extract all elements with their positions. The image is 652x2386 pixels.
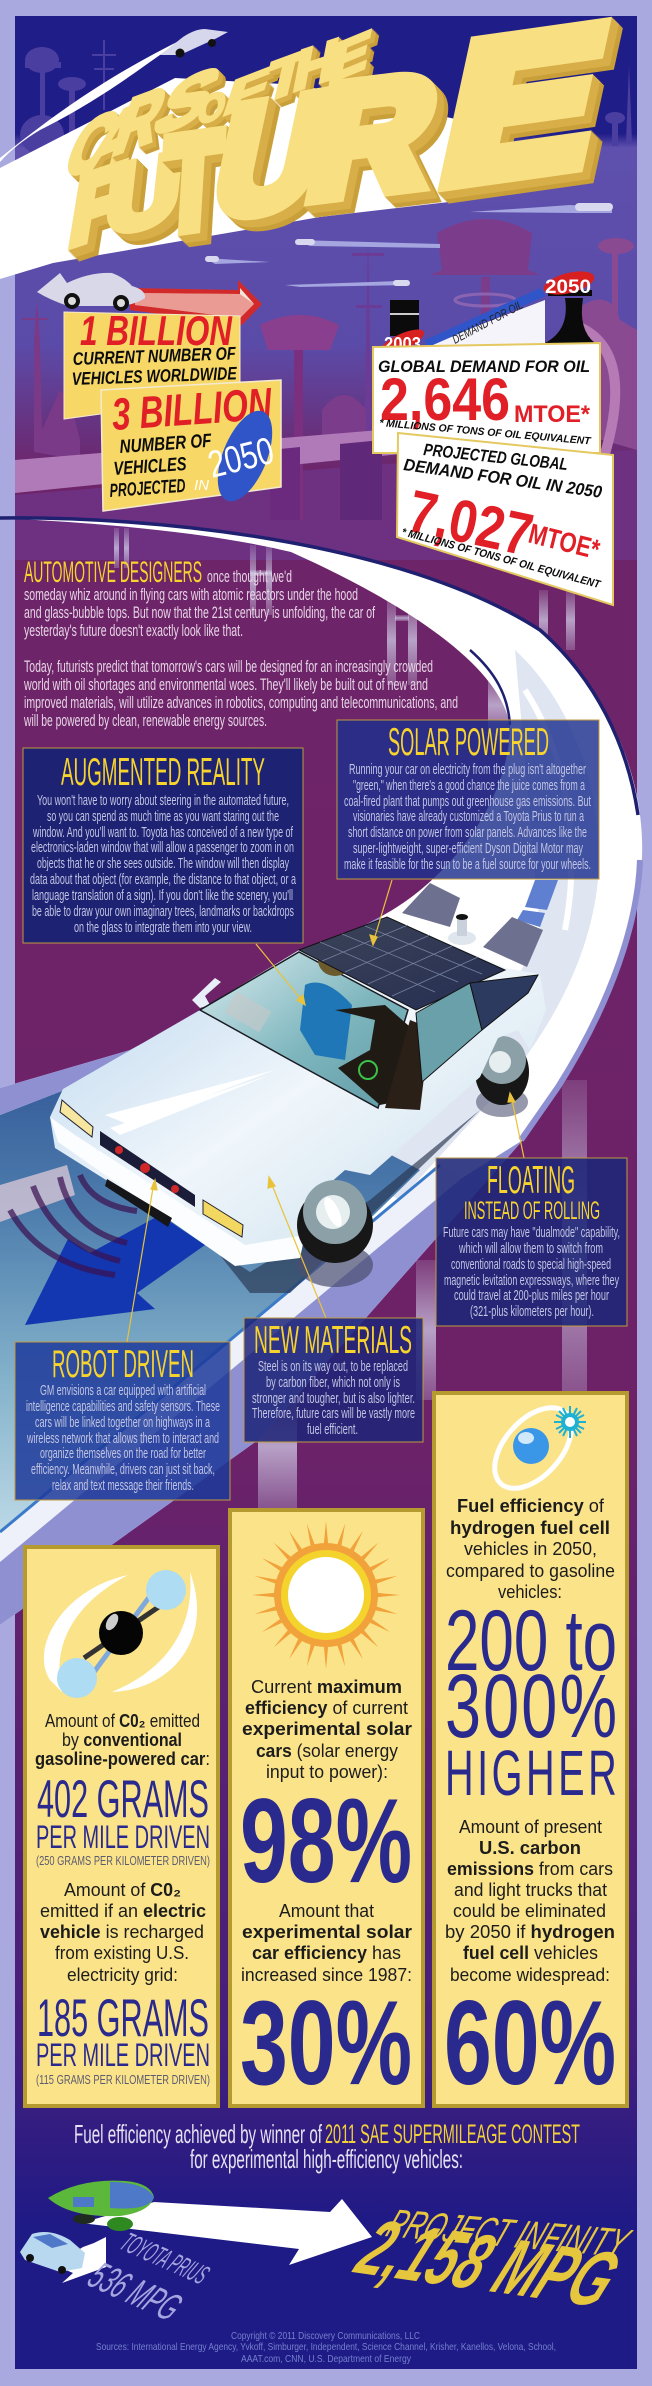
stat panel: hydrogen fuel cell: vehicles in 2050, [464, 1538, 597, 1559]
title line: Future: R [295, 39, 451, 233]
sign: projected global demand for oil: DEMAND FOR OIL IN 2050 [402, 455, 604, 502]
stat panel: hydrogen fuel cell: Amount of present [459, 1816, 602, 1837]
stat panel: CO2 emissions: gasoline-powered car: [35, 1748, 210, 1769]
stat panel: solar efficiency: Current maximum [251, 1676, 402, 1697]
stat panel: solar efficiency: cars (solar energy [256, 1740, 399, 1761]
stat panel: hydrogen fuel cell: Fuel efficiency of [457, 1495, 605, 1516]
buildings, mid city [15, 219, 637, 560]
stat panel: CO2 emissions: Amount of C0₂ emitted [45, 1710, 200, 1731]
stat panel: hydrogen fuel cell: become widespread: [450, 1964, 610, 1985]
title line: Future: U [101, 132, 186, 256]
mileage contest heading [74, 2119, 580, 2174]
mileage contest heading: Fuel efficiency achieved by winner of [74, 2119, 322, 2149]
stat panel: solar efficiency: efficiency of current [245, 1697, 408, 1718]
stat panel: CO2 emissions: vehicle is recharged [40, 1921, 204, 1942]
panel: new materials: fuel efficient. [307, 1422, 358, 1438]
intro text: once thought we'd [207, 567, 292, 586]
windshield [200, 952, 408, 1108]
panel: new materials [244, 1318, 423, 1442]
stat panel: CO2 emissions: from existing U.S. [55, 1942, 189, 1963]
intro text: yesterday's future doesn't exactly look like that. [24, 621, 243, 640]
title line: Cars of the: H [289, 26, 343, 104]
sign: global demand for oil: * MILLIONS OF TONS OF OIL EQUIVALENT [379, 417, 593, 448]
panel: robot driven: relax and text message their friends. [52, 1478, 194, 1494]
icon: Toyota Prius [20, 2232, 85, 2274]
sign: 3 billion: 2050 [204, 430, 278, 487]
panel: augmented reality: AUGMENTED REALITY [61, 751, 265, 794]
title line: Cars of the: F [217, 56, 276, 127]
sign: 3 billion: 3 BILLION [110, 378, 274, 440]
sign: projected global demand for oil [397, 433, 613, 605]
stat panel: hydrogen fuel cell: hydrogen fuel cell [450, 1517, 610, 1538]
title line: Cars of the: C [54, 92, 130, 196]
stat panel: CO2 emissions: PER MILE DRIVEN [36, 2037, 210, 2073]
panel: augmented reality: window. And you'll want to. Toyota has conceived of a new type of [32, 825, 294, 841]
panel: robot driven: ROBOT DRIVEN [52, 1343, 194, 1386]
sign: 3 billion: VEHICLES [113, 454, 187, 480]
sign: 1 billion: 1 BILLION [80, 307, 233, 354]
sign: projected global demand for oil: PROJECTED GLOBAL [423, 440, 569, 474]
sign: 1 billion [64, 307, 240, 419]
stat panel: solar efficiency [230, 1510, 423, 2110]
title line: Cars of the: S [142, 48, 233, 154]
title line: Cars of the: T [259, 38, 313, 116]
panel: new materials: stronger and tougher, but is also lighter. [252, 1391, 415, 1407]
panel: robot driven: efficiency. Meanwhile, drivers can just sit back, [31, 1462, 215, 1478]
title line: Future: F [64, 143, 130, 267]
stat panel: CO2 emissions: by conventional [62, 1729, 182, 1750]
panel: augmented reality: language translation of a sign). If you don't like the scenery, you'll [32, 888, 293, 904]
intro text: AUTOMOTIVE DESIGNERS [24, 556, 202, 589]
stat panel: CO2 emissions: electricity grid: [67, 1964, 178, 1985]
stat panel: hydrogen fuel cell: could be eliminated [453, 1900, 606, 1921]
title line: Cars of the: E [325, 17, 376, 95]
title line: Cars of the: O [195, 83, 228, 135]
sign: global demand for oil: MTOE* [514, 401, 591, 428]
panel: augmented reality [23, 748, 303, 943]
stat panel: hydrogen fuel cell: vehicles: [498, 1581, 562, 1602]
sign: 1 billion: CURRENT NUMBER OF [72, 343, 237, 369]
callout arrows [127, 880, 524, 1342]
panel: new materials: Steel is on its way out, to be replaced [258, 1359, 408, 1375]
panel: robot driven: cars will be linked together on highways in a [35, 1415, 211, 1431]
stat panel: hydrogen fuel cell: U.S. carbon [479, 1837, 581, 1858]
panel: robot driven [15, 1342, 230, 1500]
panel: robot driven: GM envisions a car equipped with artificial [40, 1383, 206, 1399]
stat panel: CO2 emissions: PER MILE DRIVEN [36, 1819, 210, 1855]
footer: copyright and sources: Copyright © 2011 Discovery Communications, LLC [231, 2330, 420, 2342]
label: Toyota Prius 536 mpg [80, 2227, 216, 2329]
chart: demand for oil 2003 to 2050: DEMAND FOR OIL [450, 298, 525, 347]
panel: augmented reality: be able to draw your own imaginary trees, landmarks or backdrops [32, 904, 294, 920]
chart: demand for oil 2003 to 2050: 2050 [545, 277, 591, 298]
sign: global demand for oil [373, 343, 600, 453]
arrow above vehicle sign [130, 280, 262, 325]
sign: 3 billion: IN [194, 477, 209, 494]
stat: 402 grams: 402 GRAMS [37, 1770, 209, 1829]
stat panel: solar efficiency: Amount that [279, 1900, 374, 1921]
flying car, top [160, 29, 228, 58]
stat panel: hydrogen fuel cell: emissions from cars [447, 1858, 613, 1879]
front wheel [297, 1187, 373, 1263]
stat panel: solar efficiency: experimental solar [242, 1921, 412, 1942]
text: TOYOTA PRIUS [114, 2227, 216, 2290]
panel: augmented reality: You won't have to worry about steering in the automated future, [37, 793, 289, 809]
car: future vehicle with passengers [50, 883, 546, 1293]
stat panel: CO2 emissions: emitted if an electric [40, 1900, 206, 1921]
small flying cars with trails [205, 203, 613, 287]
radar arcs in front of the car [10, 1175, 137, 1275]
icon: retro car [37, 273, 145, 311]
title line: Cars of the: R [105, 70, 176, 173]
title line: Future: T [159, 105, 225, 261]
intro text: and glass-bubble tops. But now that the 21st century is unfolding, the car of [24, 603, 375, 622]
label: Toyota Prius 536 mpg: 536 MPG [80, 2254, 191, 2329]
bumper panel and lights [100, 1131, 195, 1207]
stat panel: solar efficiency: increased since 1987: [241, 1964, 412, 1985]
main title: Cars of the Future [54, 0, 621, 267]
sign: global demand for oil: GLOBAL DEMAND FOR OIL [378, 357, 590, 376]
sign: projected global demand for oil: * MILLIONS OF TONS OF OIL EQUIVALENT [400, 526, 602, 591]
stat panel: hydrogen fuel cell: compared to gasoline [446, 1560, 615, 1581]
mileage contest heading: for experimental high-efficiency vehicles: [190, 2144, 463, 2174]
panel: floating instead of rolling [436, 1158, 627, 1326]
panel: augmented reality: so you can spend as much time as you want staring out the [47, 809, 279, 825]
barcode [105, 1179, 172, 1227]
panel: robot driven: wireless network that allows them to interact and [26, 1431, 219, 1447]
stat panel: CO2 emissions: (250 GRAMS PER KILOMETER DRIVEN) [36, 1853, 210, 1868]
stat panel: CO2 emissions: (115 GRAMS PER KILOMETER DRIVEN) [36, 2072, 210, 2087]
sign: 3 billion: PROJECTED [109, 476, 186, 502]
stat panel: hydrogen fuel cell: by 2050 if hydrogen [445, 1921, 615, 1942]
title line: Future: U [201, 59, 342, 252]
icon: green concept vehicle [48, 2181, 154, 2231]
panel: robot driven: intelligence capabilities and safety sensors. These [26, 1399, 220, 1415]
panel: augmented reality: objects that he or she sees outside. The window will then display [37, 856, 289, 872]
sign: projected global demand for oil: 7,027 [402, 477, 538, 569]
panel: new materials: Therefore, future cars will be vastly more [252, 1406, 415, 1422]
white highway swoosh behind title [0, 38, 466, 279]
white support columns [114, 528, 587, 1512]
panel: augmented reality: on the glass to integrate them into your view. [74, 920, 252, 936]
shadow [55, 1110, 480, 1293]
stat panel: hydrogen fuel cell: and light trucks that [454, 1879, 607, 1900]
footer: copyright and sources [96, 2330, 556, 2365]
title line: Cars of the: A [73, 83, 156, 192]
intro text: someday whiz around in flying cars with atomic reactors under the hood [24, 585, 358, 604]
panel: new materials: by carbon fiber, which not only is [266, 1375, 400, 1391]
rear wing and spoiler [192, 978, 221, 1008]
stat panel: CO2 emissions [25, 1547, 218, 2106]
icon: CO2 molecule [44, 1570, 197, 1698]
title line: Cars of the [54, 17, 376, 196]
panel: new materials: NEW MATERIALS [254, 1319, 412, 1362]
stat panel: solar efficiency: car efficiency has [252, 1942, 401, 1963]
footer: copyright and sources: AAAT.com, CNN, U.S. Department of Energy [241, 2353, 412, 2365]
stat panel: solar efficiency: experimental solar [242, 1718, 412, 1739]
icon: hydrogen atom [480, 1394, 586, 1502]
sign: 3 billion [101, 378, 283, 511]
stat panel: hydrogen fuel cell [434, 1393, 627, 2110]
solar roof [299, 917, 505, 1010]
title line: Future [64, 0, 621, 267]
blue direction arrow under the car [25, 1215, 205, 1325]
chart: demand for oil 2003 to 2050: 2003 [384, 334, 421, 354]
intro text [23, 556, 458, 730]
stat panel: hydrogen fuel cell: fuel cell vehicles [463, 1942, 598, 1963]
panel: augmented reality: data about that object (for example, the distance to that object, or a [30, 872, 297, 888]
sign: projected global demand for oil: MTOE* [526, 518, 603, 565]
stat: 185 grams: 185 GRAMS [37, 1989, 209, 2048]
panel: robot driven: organize themselves on the road for better [40, 1446, 206, 1462]
stat panel: hydrogen fuel cell: 300% [445, 1656, 617, 1757]
intro text: world with oil shortages and environmental woes. They'll likely be built out of new and [23, 675, 428, 694]
stat panel: solar efficiency: input to power): [266, 1761, 388, 1782]
hood shine [105, 1070, 275, 1125]
icon: sun [252, 1521, 400, 1669]
panel: solar powered [337, 720, 599, 879]
skyline silhouettes, upper sky [20, 40, 632, 155]
chart: demand for oil 2003 to 2050 [377, 267, 597, 359]
stat: 30%: 30% [240, 1976, 412, 2110]
stat: 98%: 98% [240, 1774, 412, 1908]
small white arrow [54, 2237, 106, 2283]
stat: 200 to 300% higher: 200 to [445, 1592, 617, 1688]
stat panel: hydrogen fuel cell: HIGHER [445, 1739, 617, 1809]
body [50, 917, 546, 1264]
sign: 3 billion: NUMBER OF [119, 431, 213, 458]
intro text: will be powered by clean, renewable energy sources. [23, 711, 267, 730]
highway curving around the car [0, 518, 642, 1625]
sign: 1 billion: VEHICLES WORLDWIDE [71, 363, 238, 389]
stat panel: CO2 emissions: Amount of C0₂ [64, 1879, 181, 1900]
large white arrow [81, 2199, 372, 2265]
rear wheel [475, 1039, 529, 1105]
passengers [300, 982, 352, 1060]
sign: global demand for oil: 2,646 [380, 366, 510, 433]
panel: augmented reality: electronics-laden window that will allow a passenger to zoom in on [31, 840, 294, 856]
side windows [416, 983, 482, 1082]
